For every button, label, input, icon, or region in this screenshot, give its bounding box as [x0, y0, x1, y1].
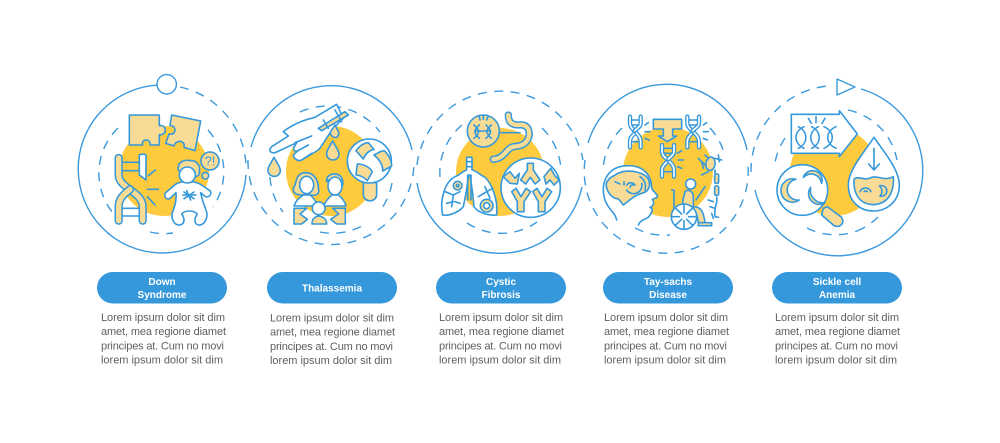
label pill: Sickle cell Anemia: Anemia — [819, 290, 855, 301]
text block: Down Syndrome: amet, mea regione diamet — [101, 326, 226, 338]
ring: Tay-sachs Disease — [584, 84, 748, 253]
text block: Tay-sachs Disease: principes at. Cum no movi — [604, 340, 727, 352]
text block: Thalassemia: Lorem ipsum dolor sit dim — [270, 312, 394, 324]
label pill: Cystic Fibrosis: Cystic — [486, 277, 516, 288]
label pill: Thalassemia: Thalassemia — [302, 284, 362, 294]
text block: Thalassemia: amet, mea regione diamet — [270, 326, 395, 338]
icon: DNA arrow, blood drop and magnifier — [777, 111, 899, 226]
panel: Tay-sachs Disease — [584, 84, 748, 253]
label pill: Sickle cell Anemia — [772, 272, 902, 304]
panel: Cystic Fibrosis — [417, 91, 583, 253]
icon: blood test and family — [268, 104, 392, 224]
text block: Tay-sachs Disease — [604, 312, 729, 366]
text block: Cystic Fibrosis — [439, 312, 564, 366]
ring: Thalassemia — [248, 86, 414, 245]
icon: puzzle, DNA and baby — [119, 115, 219, 225]
label pill: Tay-sachs Disease: Tay-sachs — [644, 277, 693, 288]
text block: Down Syndrome: principes at. Cum no movi — [101, 340, 224, 352]
label pill: Tay-sachs Disease: Disease — [649, 290, 687, 301]
panel: Down Syndrome — [78, 75, 246, 253]
text block: Sickle cell Anemia: principes at. Cum no movi — [775, 340, 898, 352]
text block: Thalassemia: lorem ipsum dolor sit dim — [270, 355, 392, 367]
text block: Tay-sachs Disease: lorem ipsum dolor sit dim — [604, 354, 726, 366]
label pill: Sickle cell Anemia: Sickle cell — [813, 277, 861, 288]
text block: Sickle cell Anemia: Lorem ipsum dolor sit dim — [775, 312, 899, 324]
ring: Cystic Fibrosis — [417, 91, 583, 253]
label pill: Cystic Fibrosis — [436, 272, 566, 304]
text block: Tay-sachs Disease: amet, mea regione diamet — [604, 326, 729, 338]
text block: Sickle cell Anemia: amet, mea regione diamet — [775, 326, 900, 338]
text block: Cystic Fibrosis: lorem ipsum dolor sit dim — [439, 354, 561, 366]
panel: Sickle cell Anemia — [751, 79, 923, 256]
text block: Cystic Fibrosis: principes at. Cum no movi — [439, 340, 562, 352]
text block: Thalassemia: principes at. Cum no movi — [270, 341, 393, 353]
text block: Down Syndrome: Lorem ipsum dolor sit dim — [101, 312, 225, 324]
panel: Thalassemia — [248, 86, 414, 245]
label pill: Thalassemia — [267, 272, 397, 304]
text block: Thalassemia — [270, 312, 395, 367]
label pill: Cystic Fibrosis: Fibrosis — [482, 290, 521, 301]
text block: Tay-sachs Disease: Lorem ipsum dolor sit dim — [604, 312, 728, 324]
text block: Sickle cell Anemia — [775, 312, 900, 366]
label pill: Tay-sachs Disease — [603, 272, 733, 304]
ring: Down Syndrome — [78, 75, 246, 253]
text block: Cystic Fibrosis: Lorem ipsum dolor sit dim — [439, 312, 563, 324]
text block: Sickle cell Anemia: lorem ipsum dolor sit dim — [775, 354, 897, 366]
text block: Cystic Fibrosis: amet, mea regione diamet — [439, 326, 564, 338]
text block: Down Syndrome — [101, 312, 226, 366]
label pill: Down Syndrome: Syndrome — [138, 290, 187, 301]
icon: DNA, stomach, lungs and antibodies — [442, 115, 560, 217]
text block: Down Syndrome: lorem ipsum dolor sit dim — [101, 354, 223, 366]
label pill: Down Syndrome — [97, 272, 227, 304]
icon: puzzle, DNA and baby: ?! — [205, 155, 215, 169]
ring: Sickle cell Anemia — [751, 79, 923, 256]
label pill: Down Syndrome: Down — [148, 277, 176, 288]
icon: DNA, brain, wheelchair and neuron — [603, 117, 722, 229]
